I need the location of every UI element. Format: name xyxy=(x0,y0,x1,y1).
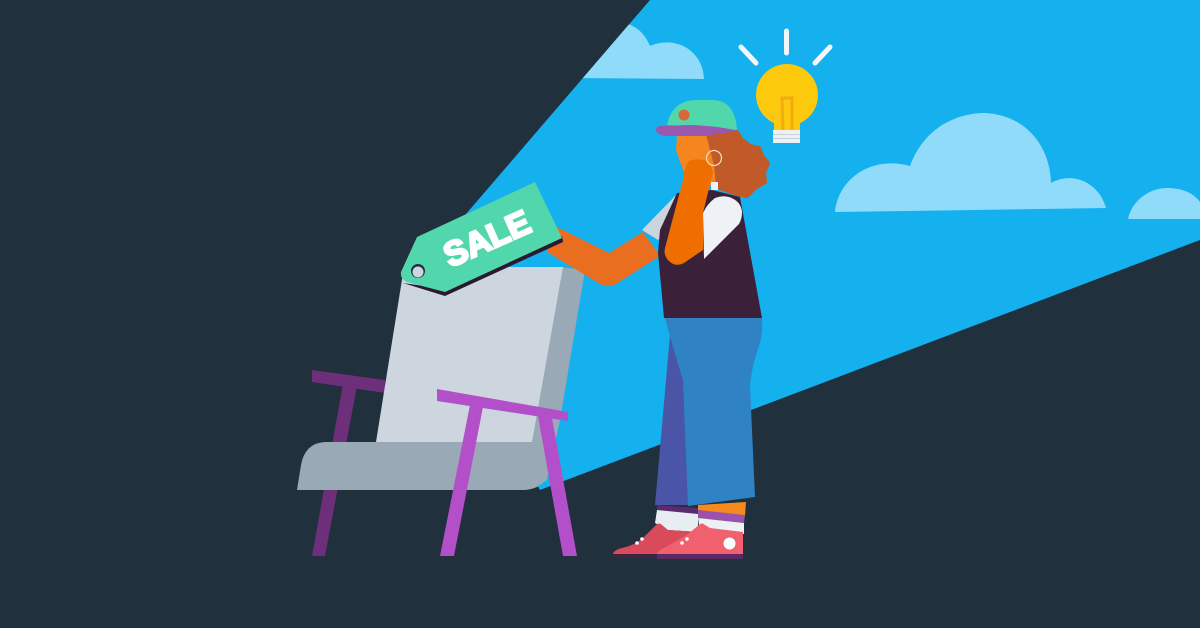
person xyxy=(547,100,768,559)
front shoe xyxy=(657,524,743,559)
chair side and seat xyxy=(297,267,585,490)
face xyxy=(676,134,716,186)
rear sleeve xyxy=(642,193,680,240)
cap xyxy=(656,100,738,136)
rear sock xyxy=(655,510,698,532)
rays xyxy=(741,31,830,63)
cloud: right xyxy=(1128,188,1200,219)
blue sky panel xyxy=(430,0,1200,490)
tag shadow xyxy=(403,236,563,296)
front sleeve xyxy=(703,196,742,259)
vest xyxy=(658,190,762,318)
rear arm xyxy=(547,227,660,286)
front ankle band xyxy=(698,510,745,523)
cloud: large xyxy=(835,113,1106,212)
hair xyxy=(706,132,768,196)
chair xyxy=(297,267,585,556)
back frame dark purple xyxy=(312,370,385,556)
tag text: SALE xyxy=(438,203,536,275)
rear shoe xyxy=(613,524,700,558)
front trouser leg xyxy=(665,318,762,506)
front ankle xyxy=(698,502,746,516)
bulb glass xyxy=(756,64,818,131)
light bulb xyxy=(741,31,830,143)
cap badge xyxy=(678,110,690,120)
tag hole xyxy=(411,264,425,278)
sale tag xyxy=(401,182,563,296)
tag body xyxy=(401,182,562,292)
filament xyxy=(782,98,792,130)
forearm and hand xyxy=(665,159,713,265)
cap brim xyxy=(656,125,738,136)
sale illustration xyxy=(297,0,1200,559)
bulb base xyxy=(773,130,800,143)
chair back cushion xyxy=(376,267,563,442)
rear ankle band xyxy=(657,505,698,514)
rear trouser leg xyxy=(655,335,700,505)
cloud: top left xyxy=(582,24,704,79)
earring xyxy=(706,150,722,166)
neck highlight xyxy=(711,182,718,190)
front sock xyxy=(698,518,744,534)
front frame bright purple xyxy=(437,389,577,556)
